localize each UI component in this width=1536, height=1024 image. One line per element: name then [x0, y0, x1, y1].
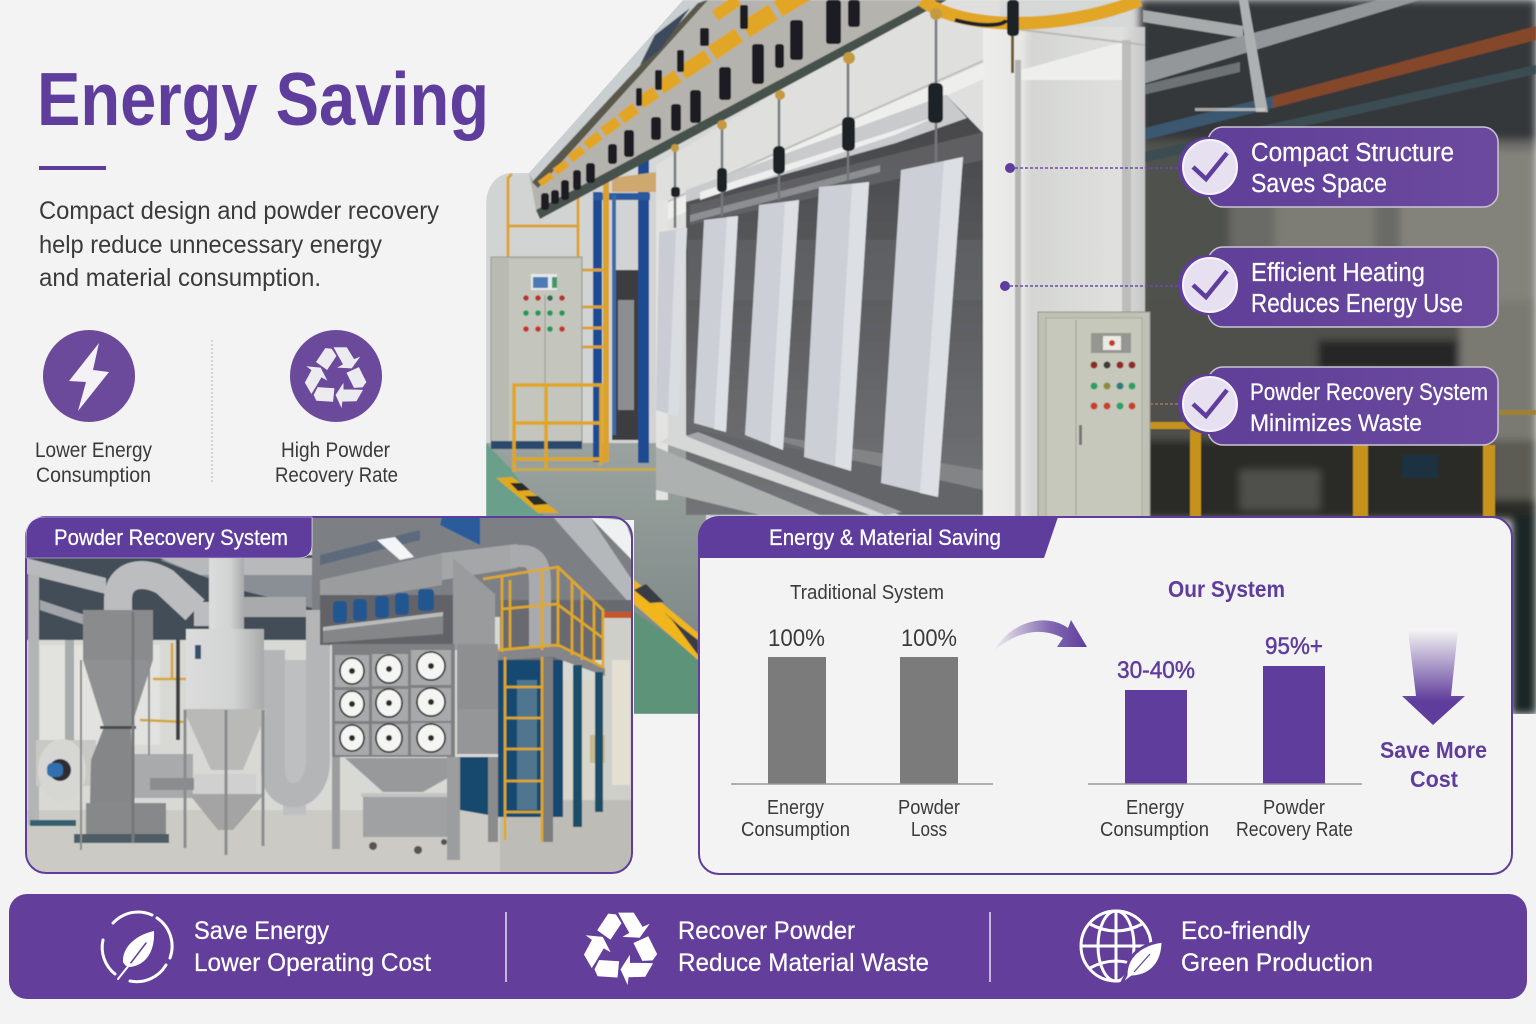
platform	[498, 645, 605, 676]
bar chart: our system: Energy	[1126, 797, 1184, 819]
bar chart: our system: Recovery Rate	[1236, 819, 1353, 841]
tall pipe with u-bend	[283, 660, 306, 815]
callout: efficient heating	[1178, 247, 1498, 327]
yellow ladder and railing	[483, 567, 603, 842]
divider	[989, 912, 991, 982]
intro text	[39, 197, 439, 292]
wall	[40, 645, 160, 745]
hanging panels	[656, 157, 963, 497]
bar chart: our system: 30-40%	[1117, 657, 1195, 684]
text: recover powder: Reduce Material Waste	[678, 949, 929, 977]
yellow service frame	[140, 643, 186, 722]
divider	[211, 340, 213, 483]
bin	[363, 794, 447, 837]
panel border	[26, 517, 632, 873]
hazard stripes	[634, 580, 698, 660]
bar chart: traditional system: Consumption	[741, 819, 850, 841]
photo: powder coating booth	[486, 0, 1536, 714]
bar chart: traditional system: Energy	[767, 797, 824, 819]
bar chart: our system: Consumption	[1100, 819, 1209, 841]
bar chart: traditional system: 100%	[901, 625, 957, 652]
label: high powder recovery rate: Recovery Rate	[275, 464, 398, 487]
intro text: Compact design and powder recovery	[39, 197, 439, 225]
left beam and post	[26, 558, 106, 594]
conveyor hangers	[541, 0, 860, 210]
callout: compact structure: Compact Structure	[1251, 139, 1454, 167]
cyclone center	[209, 558, 244, 630]
callout: compact structure	[1178, 127, 1498, 207]
horizontal pipe	[133, 754, 193, 798]
text: save energy: Lower Operating Cost	[194, 949, 431, 977]
panel: energy and material saving	[699, 517, 1512, 874]
panel heading: Energy & Material Saving	[769, 525, 1001, 550]
hanger rods and links	[675, 15, 936, 228]
callout: save more cost: Save More	[1380, 737, 1487, 763]
booth column	[983, 27, 1145, 517]
collector legs	[332, 757, 340, 849]
photo: dust collector equipment	[26, 517, 632, 873]
conveyor rail backing	[529, 0, 929, 210]
footer band	[9, 894, 1527, 999]
icon: globe with leaf	[1081, 911, 1163, 986]
callout markers and leader lines	[1000, 163, 1182, 404]
left control cabinet	[491, 257, 582, 449]
text: eco-friendly: Eco-friendly	[1181, 917, 1310, 945]
callout: powder recovery system	[1178, 367, 1498, 445]
conveyor rail: yellow beams	[540, 0, 806, 184]
top yellow arc	[922, 0, 1140, 23]
label: lower energy consumption: Consumption	[36, 464, 151, 487]
text: eco-friendly	[1181, 917, 1373, 977]
callout: save more cost	[1380, 737, 1487, 792]
label: high powder recovery rate	[275, 439, 398, 487]
panel: powder recovery system	[26, 517, 632, 873]
right control cabinet	[1038, 312, 1150, 517]
callout: powder recovery system: Powder Recovery System	[1250, 379, 1488, 406]
divider	[505, 912, 507, 982]
ceiling	[26, 555, 326, 640]
left bay wall	[486, 175, 656, 450]
booth interior	[686, 95, 983, 515]
icon: recycle	[290, 330, 382, 422]
floor	[27, 810, 500, 872]
callout: efficient heating: Reduces Energy Use	[1251, 290, 1463, 318]
bar chart: traditional system: Traditional System	[790, 582, 944, 604]
cyclone left	[118, 575, 195, 612]
text: save energy	[194, 917, 431, 977]
blue platform structure	[498, 660, 563, 817]
callout: save more cost: Cost	[1410, 766, 1458, 792]
bar chart: our system: 95%+	[1265, 633, 1323, 660]
bar chart: traditional system	[731, 582, 993, 841]
yellow gate	[514, 385, 601, 472]
bar chart: our system	[1088, 576, 1362, 841]
left yellow frame	[508, 174, 578, 257]
bar chart: traditional system: 100%	[768, 625, 825, 652]
callout: powder recovery system: Minimizes Waste	[1250, 410, 1422, 437]
arrow: save more cost	[1402, 630, 1465, 725]
bar chart: traditional system: Loss	[911, 819, 947, 841]
text: save energy: Save Energy	[194, 917, 329, 945]
panel header tab	[26, 517, 312, 558]
label: high powder recovery rate: High Powder	[281, 439, 390, 462]
label: lower energy consumption	[35, 439, 152, 487]
bar chart: our system: Powder	[1263, 797, 1325, 819]
title: Energy Saving	[37, 57, 489, 141]
text: recover powder	[678, 917, 929, 977]
panel header tab	[699, 517, 1058, 558]
booth floor and base	[735, 444, 982, 514]
callout: compact structure: Saves Space	[1251, 170, 1387, 198]
bar chart: traditional system: Powder	[898, 797, 960, 819]
fan	[36, 740, 96, 786]
collector	[320, 553, 442, 596]
conveyor rail: dark beam	[536, 0, 947, 219]
booth header	[656, 0, 999, 230]
intro text: help reduce unnecessary energy	[39, 231, 382, 259]
blue columns	[593, 192, 602, 462]
callout: efficient heating: Efficient Heating	[1251, 259, 1425, 287]
label: lower energy consumption: Lower Energy	[35, 439, 152, 462]
intro text: and material consumption.	[39, 264, 321, 292]
text: eco-friendly: Green Production	[1181, 949, 1373, 977]
icon: recycle	[577, 913, 663, 989]
text: recover powder: Recover Powder	[678, 917, 855, 945]
concrete and green floor	[486, 443, 706, 714]
icon: lightning bolt	[43, 330, 135, 422]
bar chart: our system: Our System	[1168, 576, 1285, 602]
icon: leaf ring	[102, 912, 172, 982]
panel heading: Powder Recovery System	[54, 525, 288, 550]
arrow: curved comparison	[993, 620, 1087, 652]
title accent bar	[39, 166, 106, 170]
factory background right	[1140, 0, 1536, 714]
